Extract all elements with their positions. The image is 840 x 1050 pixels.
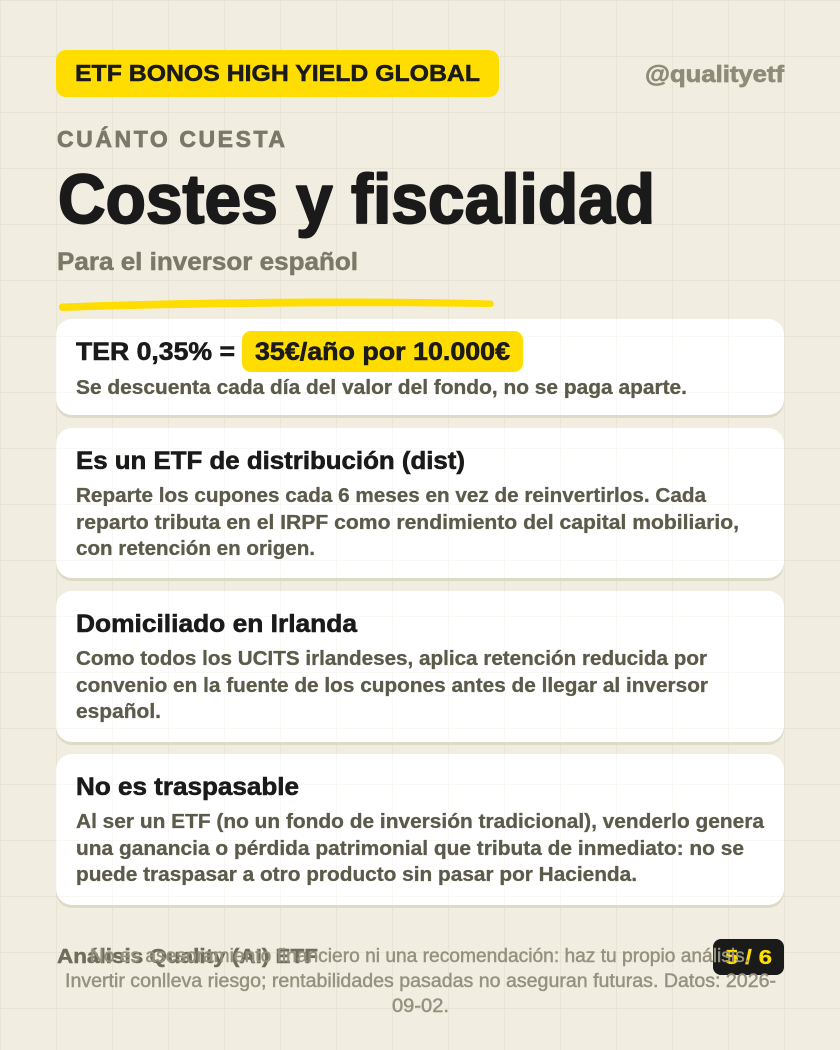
text: Irlanda description: convenio en la fuente de los cupones antes de llegar al inversor xyxy=(76,674,708,697)
text: traspasable description: Al ser un ETF (no un fondo de inversión tradicional), venderlo genera xyxy=(76,810,765,833)
card: TER xyxy=(56,319,784,418)
text: distribución description: con retención en origen. xyxy=(76,537,315,560)
text: TER description: Se descuenta cada día del valor del fondo, no se paga aparte. xyxy=(76,376,687,399)
disclaimer: No es asesoramiento financiero ni una recomendación: haz tu propio análisis. xyxy=(90,946,750,967)
badge: topic: ETF BONOS HIGH YIELD GLOBAL xyxy=(75,60,480,86)
card: traspasable xyxy=(56,754,784,908)
heading: distribución: Es un ETF de distribución (dist) xyxy=(76,447,465,475)
card: Irlanda xyxy=(56,591,784,745)
disclaimer: Invertir conlleva riesgo; rentabilidades pasadas no aseguran futuras. Datos: 2026- xyxy=(65,971,776,992)
eyebrow: CUÁNTO CUESTA xyxy=(57,125,285,152)
heading: TER: TER 0,35% = xyxy=(76,338,235,366)
subtitle: Para el inversor español xyxy=(57,248,358,276)
footer brand: Análisis Quality (AI) ETF xyxy=(57,945,318,968)
text: traspasable description: una ganancia o pérdida patrimonial que tributa de inmediato: no se xyxy=(76,837,744,860)
heading: Irlanda: Domiciliado en Irlanda xyxy=(76,610,358,638)
underline stroke xyxy=(59,298,494,311)
text: distribución description: reparto tributa en el IRPF como rendimiento del capital mobiliario, xyxy=(76,511,739,534)
page counter xyxy=(713,939,784,975)
text: traspasable description xyxy=(76,810,765,886)
badge: topic xyxy=(56,50,499,97)
disclaimer: 09-02. xyxy=(392,996,449,1017)
highlight: annual cost: 35€/año por 10.000€ xyxy=(255,338,510,366)
text: distribución description xyxy=(76,484,739,560)
text: Irlanda description: Como todos los UCITS irlandeses, aplica retención reducida por xyxy=(76,647,707,670)
page counter: 5 / 6 xyxy=(725,946,772,969)
text: Irlanda description: español. xyxy=(76,700,161,723)
disclaimer xyxy=(65,946,776,1017)
heading: traspasable: No es traspasable xyxy=(76,773,299,801)
text: traspasable description: puede traspasar a otro producto sin pasar por Hacienda. xyxy=(76,863,637,886)
text: distribución description: Reparte los cupones cada 6 meses en vez de reinvertirlos. Cada xyxy=(76,484,707,507)
text: Irlanda description xyxy=(76,647,708,723)
card: distribución xyxy=(56,428,784,581)
handle: @qualityetf xyxy=(645,61,784,87)
title: Costes y fiscalidad xyxy=(58,160,655,238)
highlight: annual cost xyxy=(242,331,523,372)
